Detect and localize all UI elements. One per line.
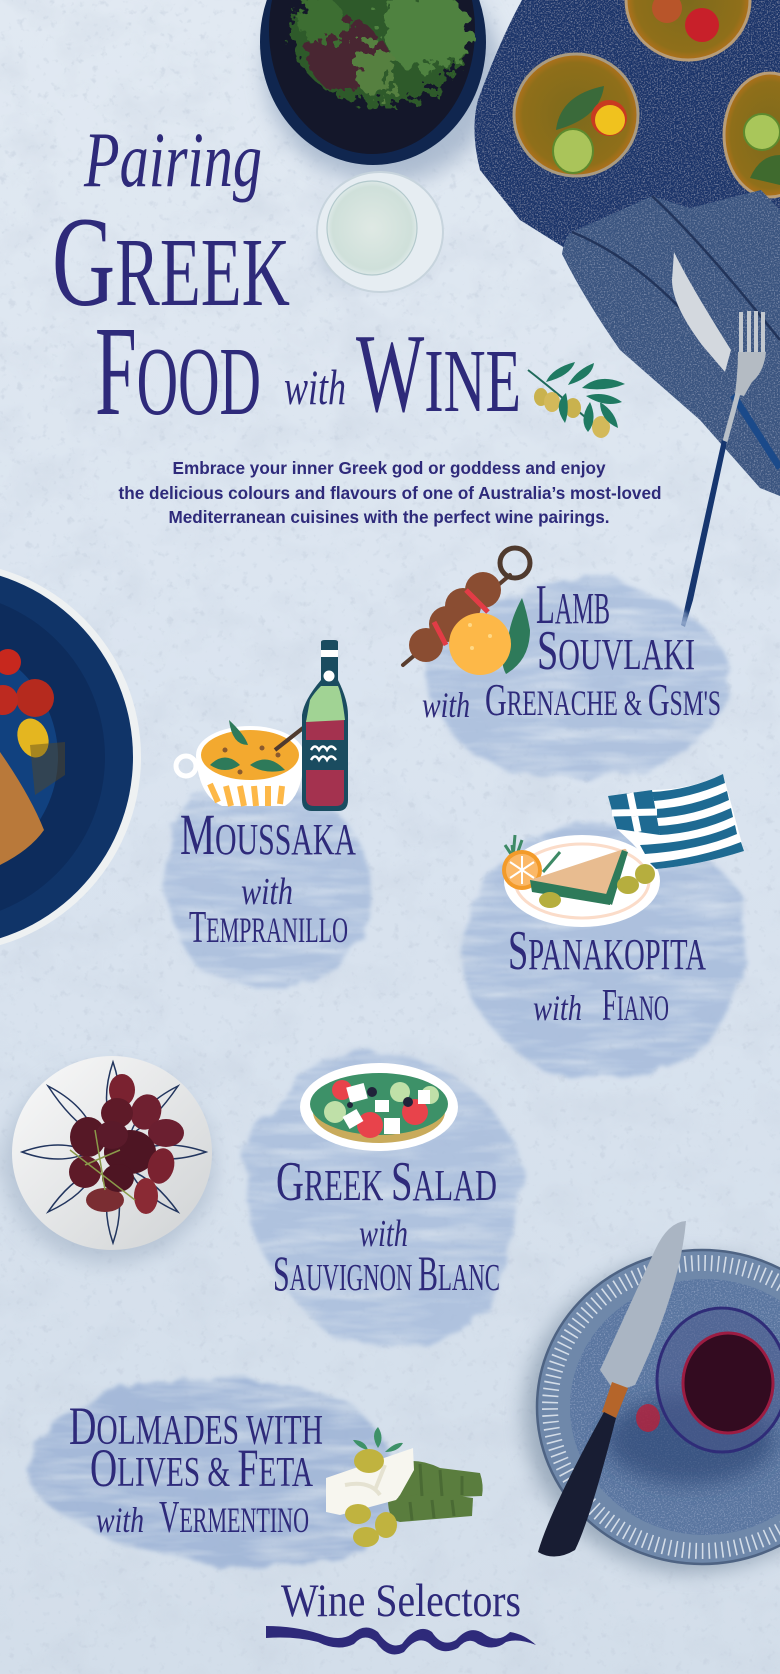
title word: Wine: WINE: [356, 312, 521, 436]
heading: Olives and Feta: OLIVES & FETA: [90, 1438, 313, 1498]
heading: Lamb: LAMB: [536, 574, 610, 636]
icon: moussaka bowl: [176, 720, 304, 806]
photo: fish plate at left edge: [0, 561, 141, 953]
heading: Souvlaki: SOUVLAKI: [537, 620, 695, 682]
watercolor blob: Greek salad: [245, 1050, 522, 1347]
panel: dolmades: VERMENTINO: [159, 1491, 309, 1542]
panel: lamb souvlaki: GRENACHE & GSM'S: [485, 674, 721, 725]
panel: dolmades: [27, 1378, 483, 1567]
icon: wine bottle: [302, 640, 348, 811]
photo: white wine glass: [317, 172, 443, 292]
photo: knife: [538, 1221, 686, 1557]
intro paragraph: Mediterranean cuisines with the perfect wine pairings.: [168, 507, 610, 527]
photo: plate with knife and red wine: [524, 1221, 780, 1572]
icon: feta, olives and dolmades: [326, 1427, 483, 1547]
wine: Sauvignon Blanc: SAUVIGNON BLANC: [273, 1245, 500, 1301]
heading: Dolmades with: DOLMADES WITH: [69, 1396, 323, 1456]
icon: olive branch: [528, 362, 625, 438]
panel: spanakopita: [462, 774, 746, 1078]
title word: with: with: [284, 359, 346, 415]
logo: Wine Selectors: Wine Selectors: [281, 1575, 521, 1627]
title word: Food: FOOD: [95, 300, 261, 442]
label: with: with: [241, 871, 293, 913]
panel: spanakopita: FIANO: [602, 979, 669, 1030]
photo: red wine glass: [636, 1308, 780, 1452]
photo: blue serving board: [474, 0, 780, 300]
intro paragraph: Embrace your inner Greek god or goddess and enjoy: [172, 458, 606, 478]
panel: lamb souvlaki: [403, 548, 732, 778]
heading: Greek Salad: GREEK SALAD: [276, 1151, 497, 1213]
heading: Moussaka: MOUSSAKA: [180, 802, 356, 867]
photo: salad bowl: [260, 0, 500, 182]
photo: denim napkin: [562, 190, 780, 496]
panel: Greek salad: [245, 1050, 522, 1347]
icon: spanakopita plate: [502, 835, 660, 927]
wine: Tempranillo: TEMPRANILLO: [189, 901, 348, 952]
icon: skewer with lemon: [403, 548, 530, 675]
title: Pairing Greek Food with Wine: [52, 116, 521, 442]
wine: with Grenache and GSMs: with: [422, 685, 470, 725]
icon: salad plate: [300, 1063, 458, 1151]
icon: Greek flag: [608, 774, 744, 869]
photo: olives plate: [3, 1056, 213, 1263]
title word: Greek: GREEK: [52, 191, 290, 333]
panel: moussaka: [165, 640, 373, 989]
intro paragraph: the delicious colours and flavours of one of Australia’s most-loved: [118, 483, 662, 503]
wine: with Vermentino: with: [96, 1500, 144, 1540]
label: with: with: [359, 1213, 408, 1255]
title word: Pairing: Pairing: [83, 116, 262, 203]
watercolor blob: dolmades: [27, 1378, 397, 1567]
intro paragraph: [118, 458, 662, 527]
logo: Wine Selectors: [266, 1575, 536, 1654]
watercolor blob: lamb souvlaki: [424, 578, 732, 778]
wine: with Fiano: with: [533, 988, 582, 1028]
watercolor blob: moussaka: [165, 782, 373, 989]
photo: three glasses with tomatoes: [514, 0, 780, 197]
watercolor blob: spanakopita: [462, 822, 746, 1078]
photo: fork and knife: [672, 252, 780, 627]
